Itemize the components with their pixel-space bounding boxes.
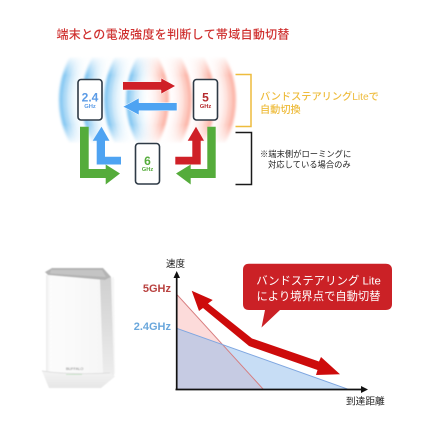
yellow note — [260, 90, 379, 116]
x axis label: 到達距離 — [346, 394, 385, 408]
red arrow: 2.4 to 5 GHz — [123, 78, 176, 94]
phone: 5 GHz: 5 — [202, 91, 209, 105]
5GHz label: 5GHz — [143, 283, 171, 295]
red signal waves — [140, 56, 234, 144]
blue arrow: 5 to 2.4 GHz — [123, 98, 177, 115]
yellow note: 自動切換 — [260, 103, 301, 116]
yellow note: バンドステアリングLiteで — [260, 90, 379, 103]
phone: 2.4 GHz: GHz — [84, 104, 96, 110]
black bracket — [236, 132, 252, 184]
blue line — [177, 328, 348, 389]
phone: 6 GHz: 6 — [144, 154, 151, 168]
y axis label: 速度 — [166, 258, 186, 270]
2.4GHz label: 2.4GHz — [134, 321, 171, 333]
chart — [134, 258, 385, 408]
black note — [260, 149, 351, 170]
callout — [243, 264, 392, 328]
black note: ※端末側がローミングに — [260, 149, 351, 159]
phone: 5 GHz — [194, 80, 218, 120]
blue area — [177, 328, 348, 389]
phone: 6 GHz — [136, 144, 160, 184]
callout: バンドステアリング Lite — [256, 274, 381, 288]
router — [42, 268, 115, 388]
axes — [176, 276, 362, 390]
phone: 5 GHz: GHz — [200, 104, 211, 110]
router: BUFFALO — [66, 367, 83, 371]
thick red double arrow — [192, 291, 340, 375]
red arrow: 6 to 5 GHz — [175, 127, 204, 164]
phone: 6 GHz: GHz — [142, 167, 153, 173]
callout: により境界点で自動切替 — [256, 289, 381, 303]
red area — [177, 294, 263, 389]
yellow bracket — [236, 74, 251, 126]
title: 端末との電波強度を判断して帯域自動切替 — [56, 26, 290, 42]
phone: 2.4 GHz: 2.4 — [82, 91, 99, 105]
blue signal waves — [61, 56, 155, 144]
black note: 対応している場合のみ — [268, 160, 351, 170]
phone: 2.4 GHz — [78, 80, 102, 120]
green arrow: left — [80, 127, 120, 184]
green arrow: right — [176, 127, 216, 184]
red line — [177, 294, 263, 389]
blue arrow: 6 to 2.4 GHz — [93, 127, 121, 164]
